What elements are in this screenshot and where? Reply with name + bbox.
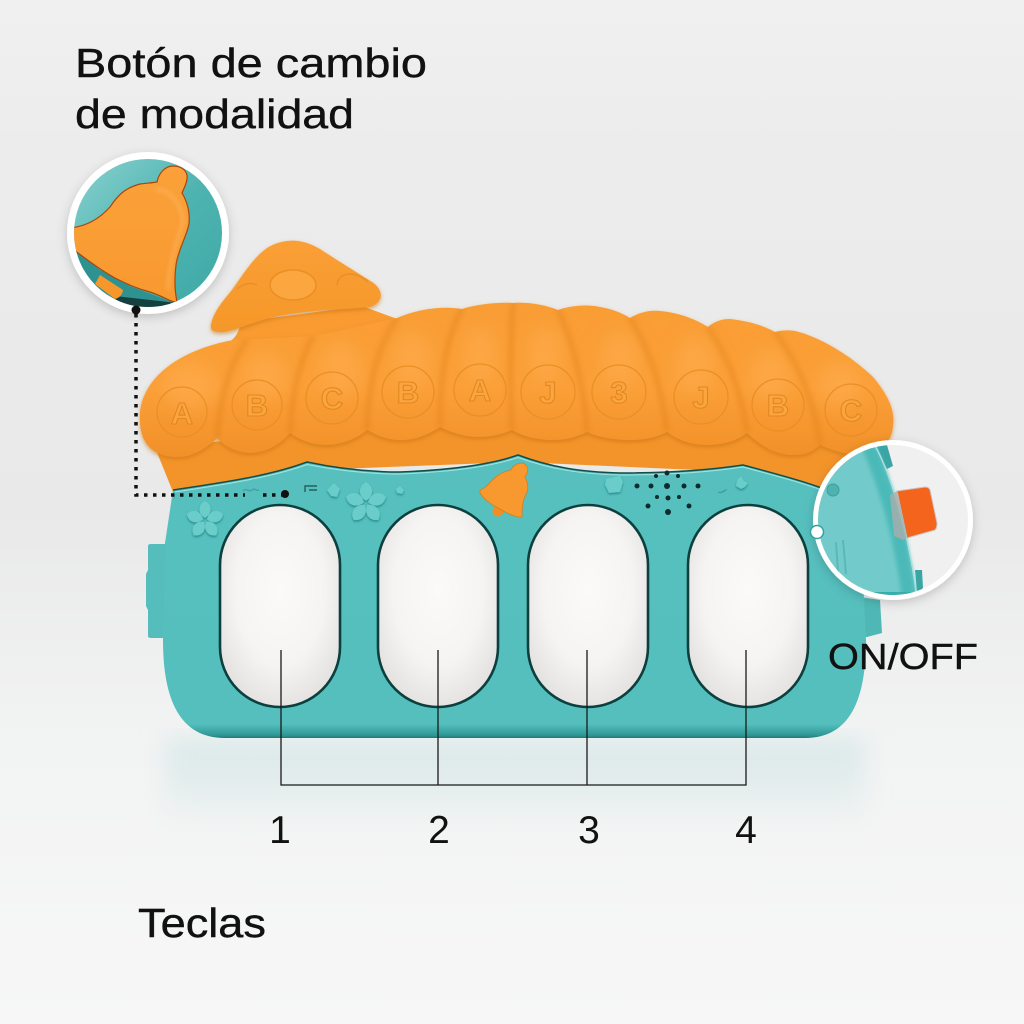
white keys xyxy=(220,505,808,707)
roof letters: C xyxy=(840,393,862,428)
mushroom chimney xyxy=(211,241,381,332)
roof letters: B xyxy=(397,375,419,410)
key bracket lines xyxy=(281,650,746,785)
key numbers: 1 xyxy=(269,809,291,852)
roof letters: B xyxy=(246,388,268,423)
small orange bell xyxy=(480,463,528,517)
teal body xyxy=(163,455,866,738)
callout: on/off switch magnifier xyxy=(810,440,973,600)
orange roof base xyxy=(156,400,880,502)
body small marks xyxy=(243,486,726,493)
roof letters: A xyxy=(469,373,491,408)
body decorations xyxy=(185,476,748,539)
key numbers: 2 xyxy=(428,809,450,852)
key numbers: 3 xyxy=(578,809,600,852)
lobe shading xyxy=(166,306,858,426)
toy xyxy=(140,241,893,738)
on/off label: ON/OFF xyxy=(828,636,978,677)
title: de modalidad xyxy=(75,91,354,137)
key 2 xyxy=(378,505,498,707)
key 4 xyxy=(688,505,808,707)
key numbers xyxy=(269,809,757,852)
body top edge xyxy=(173,455,845,500)
key numbers: 4 xyxy=(735,809,757,852)
roof letters: 3 xyxy=(610,375,628,410)
callout: bell magnifier xyxy=(67,152,229,320)
roof letters: A xyxy=(171,396,193,431)
chimney neck xyxy=(222,306,400,352)
right side tab xyxy=(860,597,882,637)
floor reflection xyxy=(165,738,865,838)
key 1 xyxy=(220,505,340,707)
roof letters: B xyxy=(767,388,789,423)
keys label: Teclas xyxy=(138,900,266,946)
roof letters: J xyxy=(692,380,710,415)
title xyxy=(75,40,427,137)
roof letters xyxy=(157,364,877,437)
roof letters: C xyxy=(321,381,343,416)
dotted leader line xyxy=(132,306,289,498)
speaker dots xyxy=(634,470,700,515)
roof letters: J xyxy=(539,375,557,410)
roof lobes xyxy=(140,303,893,457)
left side button xyxy=(146,544,167,638)
key 3 xyxy=(528,505,648,707)
title: Botón de cambio xyxy=(75,40,427,86)
